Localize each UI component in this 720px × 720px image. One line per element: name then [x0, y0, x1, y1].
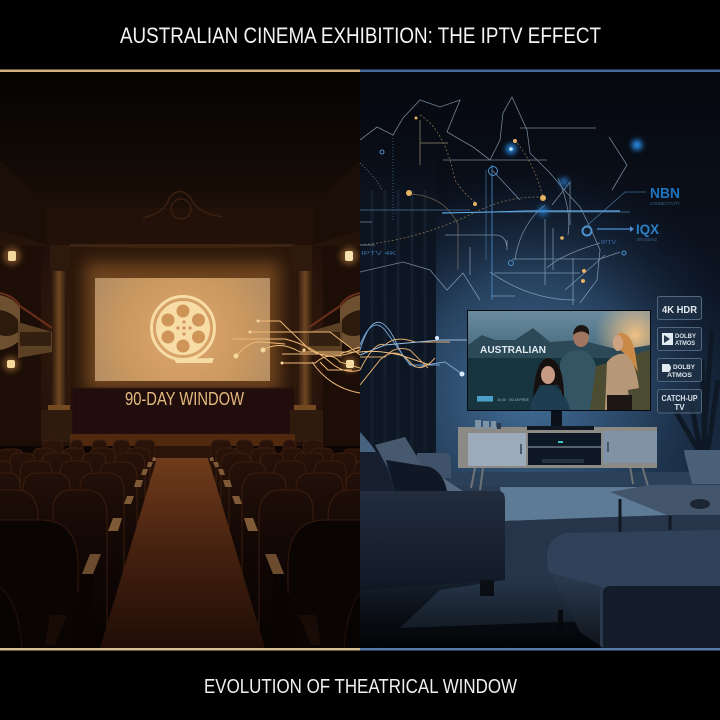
title: AUSTRALIAN CINEMA EXHIBITION: THE IPTV EFFECT: [120, 23, 601, 48]
man: [560, 325, 596, 410]
label: NBN: CONNECTIVITY: [650, 201, 680, 206]
aisle carpet: [100, 458, 265, 648]
play chip: [477, 396, 493, 402]
label: IQX: BROADBAND: [637, 237, 658, 242]
badge: Dolby Atmos second: [658, 358, 702, 382]
lit floorboards: [500, 487, 668, 521]
television: [467, 310, 651, 428]
badge: Catch-up TV: TV: [674, 403, 685, 412]
ceiling: [0, 147, 360, 246]
stage wall: [70, 248, 295, 388]
badge: 4K HDR: 4K HDR: [662, 304, 697, 316]
cornice: [70, 244, 295, 247]
right side wall: [323, 280, 360, 446]
legs: [471, 466, 648, 490]
girl: [530, 358, 570, 410]
row 5: [10, 452, 356, 502]
badge: Dolby Atmos second: DOLBY: [673, 364, 696, 371]
label: IQX: [597, 221, 660, 242]
movie title: AUSTRALIAN: [480, 344, 546, 356]
media cabinet: [458, 427, 657, 490]
rug: [400, 514, 720, 628]
sun glow: [590, 311, 650, 371]
lower device: [542, 459, 584, 463]
ring nodes: [380, 150, 626, 266]
runtime text: 1h 00 · 00:14:FREE: [497, 397, 529, 402]
bottom rule: cool: [360, 648, 720, 650]
blue glows: [506, 144, 516, 154]
row 1: [0, 520, 78, 650]
stage step: [155, 446, 211, 458]
sofa: [360, 432, 505, 596]
seat frame: [72, 574, 93, 650]
main data line: [442, 211, 620, 213]
back rest: [360, 452, 395, 495]
wire nodes: [234, 320, 353, 367]
woman right: [605, 333, 639, 410]
handles: [520, 444, 522, 454]
row 3: [0, 473, 124, 650]
plant pot front: [684, 452, 720, 484]
armrests: [108, 457, 157, 531]
map of Australia: [360, 97, 646, 305]
row 4: [0, 461, 137, 650]
panel: IPTV living room: [360, 71, 720, 650]
right balcony: [308, 293, 360, 358]
sofa arm: [417, 453, 451, 478]
panel: traditional cinema: [0, 71, 376, 650]
cabinet body: [458, 427, 657, 468]
armrest foreground: [45, 615, 67, 645]
ottoman: [547, 530, 720, 650]
map labels tiny: IPTV 4K: [361, 251, 397, 257]
top: [547, 530, 720, 590]
top rule: warm: [0, 70, 360, 72]
mountains: [468, 328, 650, 365]
blue signal wires: [360, 322, 467, 385]
floor: [14, 446, 352, 482]
coastline: [360, 97, 600, 303]
light cushion: [360, 432, 376, 462]
shelves: [528, 433, 601, 465]
tv bezel: [467, 310, 651, 411]
skirting: [450, 472, 720, 486]
map labels tiny: IPTV: [601, 240, 616, 246]
side boxes: [0, 160, 360, 245]
right pillar: [290, 245, 323, 442]
plant: [675, 330, 720, 484]
stage wall shadow: [72, 388, 294, 434]
proscenium crest: [143, 192, 222, 219]
curtains: [360, 150, 436, 455]
south coast: [360, 262, 480, 300]
floor base: [360, 472, 720, 649]
right seating block: [209, 440, 360, 648]
map labels tiny: [361, 240, 616, 257]
row 0: [0, 582, 22, 650]
badge: Dolby Atmos: ATMOS: [675, 340, 696, 347]
decor cups: [475, 420, 501, 429]
badge: Dolby Atmos: [658, 328, 702, 350]
map nodes: [380, 116, 642, 283]
right hillside: [590, 350, 650, 410]
label: NBN: NBN: [650, 185, 680, 202]
footer caption: EVOLUTION OF THEATRICAL WINDOW: [204, 676, 517, 698]
bottom rule: warm: [0, 648, 360, 650]
grey cushion: [375, 437, 422, 475]
dark cushion: [386, 460, 447, 492]
screen caption: 90-DAY WINDOW: [125, 389, 244, 409]
seat top: [440, 478, 463, 491]
projection screen: [95, 278, 270, 381]
leg: [558, 610, 563, 632]
tv stand: [551, 408, 562, 428]
sofa feet: [480, 580, 494, 596]
sofa body: [360, 491, 505, 590]
row 7: [43, 440, 155, 480]
water: [468, 358, 650, 410]
feature badges: [658, 296, 702, 413]
badge: Dolby Atmos second: ATMOS: [667, 372, 693, 379]
label: IQX: IQX: [636, 221, 660, 237]
tv base on cabinet: [527, 426, 594, 430]
shelf plank: [528, 446, 601, 448]
armrest front: [82, 554, 101, 574]
node on wire: [435, 336, 439, 340]
right door: [603, 431, 657, 463]
upper dark backdrop: [360, 71, 720, 481]
wire end node: [460, 372, 464, 376]
badge: Catch-up TV: CATCH-UP: [662, 394, 698, 403]
screen halo: [85, 262, 280, 392]
left pillar: [41, 245, 72, 442]
sky: [468, 311, 650, 410]
wall glow: [360, 165, 720, 485]
wall lamps: [3, 247, 358, 372]
left side wall: [0, 246, 41, 446]
top rule: cool: [360, 70, 720, 72]
receiver light: [558, 441, 563, 443]
route lines: [420, 115, 475, 202]
tv picture: [468, 311, 650, 410]
left seating block: [0, 440, 157, 650]
row 6: [0, 448, 360, 498]
amber nodes: [406, 116, 586, 283]
row 2: [0, 490, 107, 650]
badge: Dolby Atmos: DOLBY: [675, 333, 697, 340]
front: [603, 586, 720, 650]
bottom vignette: [360, 580, 600, 650]
badge: Catch-up TV: [658, 390, 702, 413]
icon: film reel: [152, 296, 214, 363]
proscenium frame: [47, 208, 313, 246]
coffee table: [610, 485, 720, 532]
theatre wall: [41, 246, 323, 446]
left door: [468, 433, 526, 466]
stage: [70, 434, 295, 446]
left balcony: [0, 293, 52, 358]
gold signal wires: [232, 321, 360, 393]
side: [550, 573, 603, 648]
